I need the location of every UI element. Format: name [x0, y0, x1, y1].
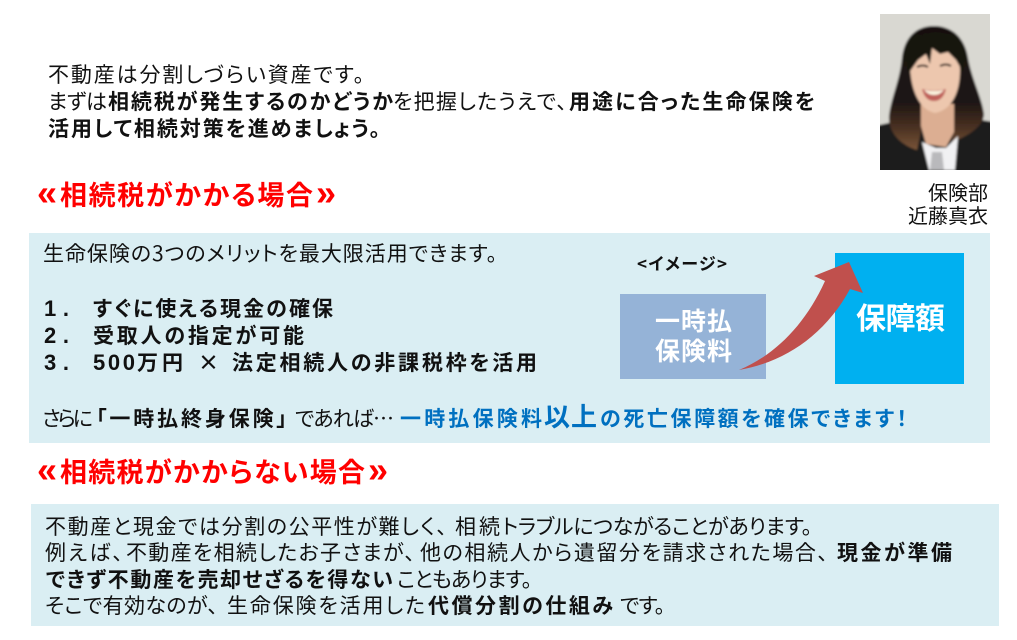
- panel body text: 現金が準備: [837, 537, 952, 567]
- merit list: 3.: [44, 350, 69, 375]
- intro text: を把握したうえで、: [393, 86, 567, 116]
- panel body text: 生命保険を活用した: [227, 590, 425, 620]
- panel body text: こともあります。: [397, 564, 532, 594]
- merit list: 法定相続人の非課税枠を活用: [232, 347, 537, 377]
- heading: inheritance tax does not apply: «: [37, 449, 57, 490]
- intro text: まずは: [48, 86, 107, 116]
- closing statement: の死亡保障額を確保できます！: [600, 403, 907, 433]
- panel body text: トラブルにつながることがあります。: [502, 511, 812, 541]
- closing statement: 「一時払終身保険」: [96, 403, 287, 433]
- intro text: 不動産は分割しづらい資産です。: [48, 59, 364, 89]
- panel body text: 不動産を相続したお子さまが、: [126, 537, 415, 567]
- intro text: 活用して相続対策を進めましょう。: [48, 113, 380, 143]
- merit list: [44, 293, 537, 377]
- intro text: 用途に合った生命保険を: [569, 86, 815, 116]
- panel body text: 他の相続人から遺留分を請求された場合、: [420, 537, 828, 567]
- closing statement: 一時払保険料: [400, 403, 542, 433]
- box: coverage amount: [835, 253, 964, 384]
- heading: inheritance tax does not apply: 相続税がかからない場合: [60, 451, 365, 490]
- closing statement: [42, 397, 907, 434]
- panel lead text: 生命保険の3つのメリットを最大限活用できます。: [43, 238, 497, 268]
- panel body text: そこで有効なのが、: [45, 590, 218, 620]
- panel body text: できず不動産を売却せざるを得ない: [46, 564, 393, 594]
- merit list: 1.: [44, 296, 69, 321]
- intro text: [48, 59, 815, 143]
- arrow: [739, 262, 863, 370]
- panel: inheritance tax applies: [29, 233, 990, 443]
- heading: inheritance tax applies: 相続税がかかる場合: [60, 174, 313, 213]
- photo caption: 近藤真衣: [908, 200, 988, 229]
- intro text: 相続税が発生するのかどうか: [108, 86, 393, 116]
- closing statement: さらに: [42, 403, 93, 433]
- image label: <イメージ>: [637, 250, 727, 275]
- merit list: すぐに使える現金の確保: [93, 293, 333, 323]
- closing statement: 以上: [544, 397, 597, 434]
- panel body text: [45, 511, 952, 620]
- merit list: ×: [198, 347, 219, 377]
- box: single premium: [620, 294, 766, 379]
- panel body text: です。: [620, 590, 665, 620]
- photo caption: [908, 177, 988, 229]
- merit list: 万円: [137, 347, 183, 377]
- box: single premium: 一時払: [655, 302, 732, 338]
- closing statement: であれば…: [295, 403, 394, 433]
- portrait photo: [880, 14, 990, 170]
- panel body text: 代償分割の仕組み: [428, 590, 613, 620]
- heading: inheritance tax applies: «: [37, 172, 57, 213]
- heading: inheritance tax does not apply: »: [368, 449, 388, 490]
- panel body text: 不動産と現金では分割の公平性が難しく、: [45, 511, 447, 541]
- merit list: 受取人の指定が可能: [93, 320, 304, 350]
- heading: inheritance tax applies: »: [316, 172, 336, 213]
- photo caption: 保険部: [928, 177, 988, 206]
- box: coverage amount: 保障額: [856, 294, 945, 338]
- panel: inheritance tax does not apply: [31, 504, 999, 626]
- panel body text: 相続: [455, 511, 500, 541]
- panel body text: 例えば、: [45, 537, 123, 567]
- box: single premium: 保険料: [655, 332, 732, 368]
- merit list: 2.: [44, 323, 69, 348]
- merit list: 500: [93, 350, 135, 375]
